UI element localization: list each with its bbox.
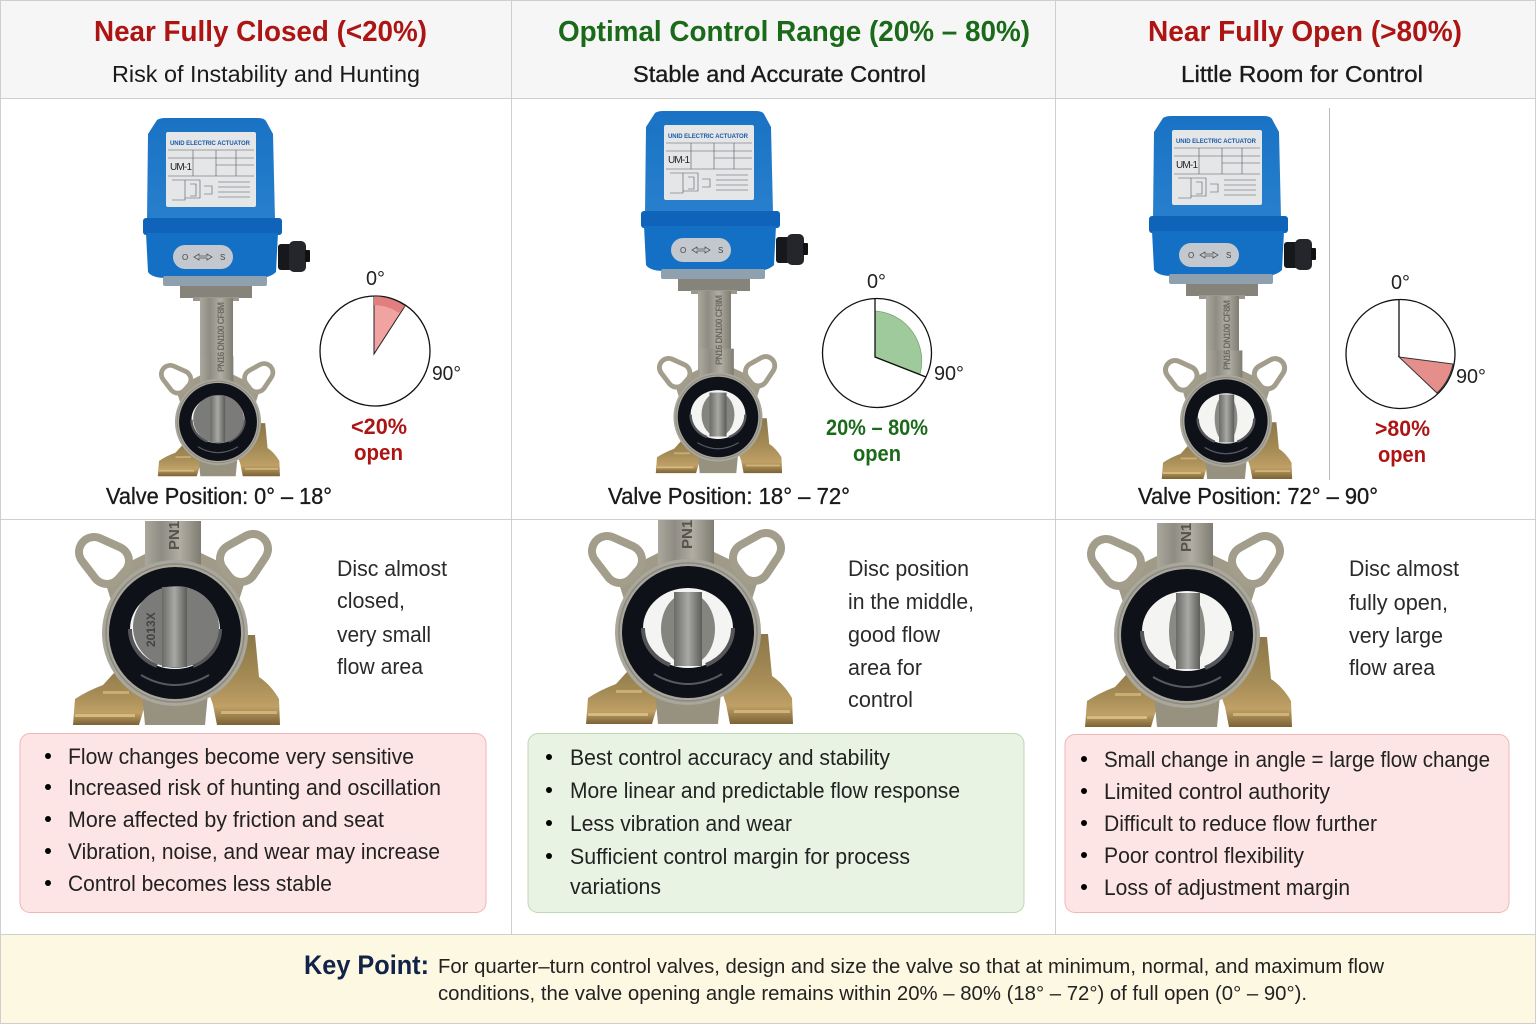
- column 3 header: Near Fully Open (>80%): [1148, 16, 1462, 48]
- key point: For quarter–turn control valves, design and size the valve so that at minimum, normal, and maximum flow: [438, 956, 1385, 978]
- panel: near open effects: Difficult to reduce flow further: [1104, 811, 1377, 836]
- valve photo: near open: PN16 DN100 CF8M: [1222, 300, 1232, 370]
- gauge: 20 to 80 percent open: open: [853, 441, 901, 466]
- panel: near closed effects: Flow changes become very sensitive: [68, 744, 414, 769]
- valve photo: near open: [1149, 116, 1316, 479]
- column 1 header: [94, 16, 427, 87]
- column 1 header: Near Fully Closed (<20%): [94, 16, 427, 48]
- panel: near closed effects: Vibration, noise, and wear may increase: [68, 839, 440, 864]
- gauge: 20 to 80 percent open: [822, 271, 964, 466]
- disc text 3: fully open,: [1349, 590, 1448, 615]
- disc closeup: nearly closed: 2013X: [144, 612, 158, 647]
- panel: near open effects: Loss of adjustment margin: [1104, 875, 1350, 900]
- valve photo: optimal: S: [718, 246, 723, 255]
- valve position label 2: Valve Position: 18° – 72°: [608, 483, 850, 509]
- gauge: over 80 percent open: 0°: [1391, 272, 1410, 294]
- gauge: over 80 percent open: open: [1378, 442, 1426, 467]
- gauge: over 80 percent open: [1346, 272, 1486, 467]
- gauge: under 20 percent open: [320, 268, 461, 465]
- column 2 header: [558, 16, 1030, 87]
- panel: optimal range effects: variations: [570, 874, 661, 899]
- column 1 header: Risk of Instability and Hunting: [112, 61, 420, 87]
- gauge: under 20 percent open: <20%: [351, 414, 407, 439]
- disc text 1: closed,: [337, 588, 405, 613]
- disc closeup: nearly closed: PN1: [166, 521, 183, 550]
- panel: near open effects: [1065, 734, 1509, 912]
- disc text 3: very large: [1349, 623, 1443, 648]
- key point: Key Point:: [304, 950, 429, 980]
- panel: optimal range effects: More linear and predictable flow response: [570, 778, 960, 803]
- panel: optimal range effects: Less vibration and wear: [570, 811, 792, 836]
- panel: optimal range effects: Sufficient control margin for process: [570, 844, 910, 869]
- disc closeup: nearly closed: [73, 521, 280, 725]
- disc closeup: nearly open: [1085, 523, 1292, 727]
- panel: near closed effects: Control becomes less stable: [68, 871, 332, 896]
- disc text 1: flow area: [337, 654, 424, 679]
- disc text 1: very small: [337, 622, 431, 647]
- disc closeup: middle: PN1: [679, 520, 696, 549]
- valve photo: near open: UNID ELECTRIC ACTUATOR: [1176, 139, 1257, 145]
- valve photo: near open: O: [1188, 251, 1194, 260]
- disc text 2: area for: [848, 655, 922, 680]
- gauge: 20 to 80 percent open: 20% – 80%: [826, 415, 928, 440]
- panel: near open effects: Limited control authority: [1104, 779, 1330, 804]
- valve photo: near closed: S: [220, 253, 225, 262]
- gauge: over 80 percent open: 90°: [1456, 366, 1486, 388]
- header band: [0, 0, 1536, 98]
- disc text 3: flow area: [1349, 655, 1436, 680]
- valve photo: optimal: O: [680, 246, 686, 255]
- gauge: 20 to 80 percent open: 0°: [867, 271, 886, 293]
- key point band background: [0, 935, 1536, 1024]
- valve photo: near closed: UM-1: [170, 162, 192, 173]
- valve photo: near open: UM-1: [1176, 160, 1198, 171]
- disc closeup: nearly open: PN1: [1178, 523, 1195, 552]
- gauge: under 20 percent open: 0°: [366, 268, 385, 290]
- panel: near closed effects: More affected by friction and seat: [68, 807, 384, 832]
- valve photo: optimal: PN16 DN100 CF8M: [714, 295, 724, 365]
- valve position label 1: Valve Position: 0° – 18°: [106, 483, 332, 509]
- gauge: 20 to 80 percent open: 90°: [934, 363, 964, 385]
- valve photo: near closed: [143, 118, 310, 476]
- disc closeup: middle: [586, 520, 793, 724]
- disc text 2: [848, 556, 974, 712]
- valve photo: optimal: [641, 111, 808, 473]
- key point: conditions, the valve opening angle remains within 20% – 80% (18° – 72°) of full open (0° – 90°).: [438, 983, 1307, 1005]
- disc text 2: control: [848, 687, 913, 712]
- valve photo: near open: S: [1226, 251, 1231, 260]
- panel: near closed effects: [20, 734, 486, 912]
- column 2 header: Stable and Accurate Control: [633, 61, 926, 87]
- valve photo: optimal: UNID ELECTRIC ACTUATOR: [668, 134, 749, 140]
- panel: optimal range effects: Best control accuracy and stability: [570, 745, 890, 770]
- column 2 header: Optimal Control Range (20% – 80%): [558, 16, 1030, 48]
- column 3 header: Little Room for Control: [1181, 61, 1423, 87]
- panel: near closed effects: Increased risk of hunting and oscillation: [68, 775, 441, 800]
- gauge: over 80 percent open: >80%: [1375, 416, 1430, 441]
- disc text 2: in the middle,: [848, 589, 974, 614]
- column 3 header: [1148, 16, 1462, 87]
- disc text 3: Disc almost: [1349, 556, 1459, 581]
- disc text 3: [1349, 556, 1459, 680]
- panel: near open effects: Small change in angle = large flow change: [1104, 747, 1490, 772]
- disc text 1: Disc almost: [337, 556, 447, 581]
- gauge: under 20 percent open: 90°: [432, 363, 461, 385]
- disc text 2: good flow: [848, 622, 940, 647]
- valve position label 3: Valve Position: 72° – 90°: [1138, 483, 1378, 509]
- panel: near open effects: Poor control flexibility: [1104, 843, 1304, 868]
- valve photo: near closed: O: [182, 253, 188, 262]
- key point: [304, 950, 1385, 1005]
- gauge: under 20 percent open: open: [354, 440, 403, 465]
- valve photo: optimal: UM-1: [668, 155, 690, 166]
- disc text 2: Disc position: [848, 556, 969, 581]
- valve photo: near closed: UNID ELECTRIC ACTUATOR: [170, 141, 251, 147]
- disc text 1: [337, 556, 447, 679]
- valve photo: near closed: PN16 DN100 CF8M: [216, 302, 226, 372]
- panel: optimal range effects: [528, 734, 1024, 912]
